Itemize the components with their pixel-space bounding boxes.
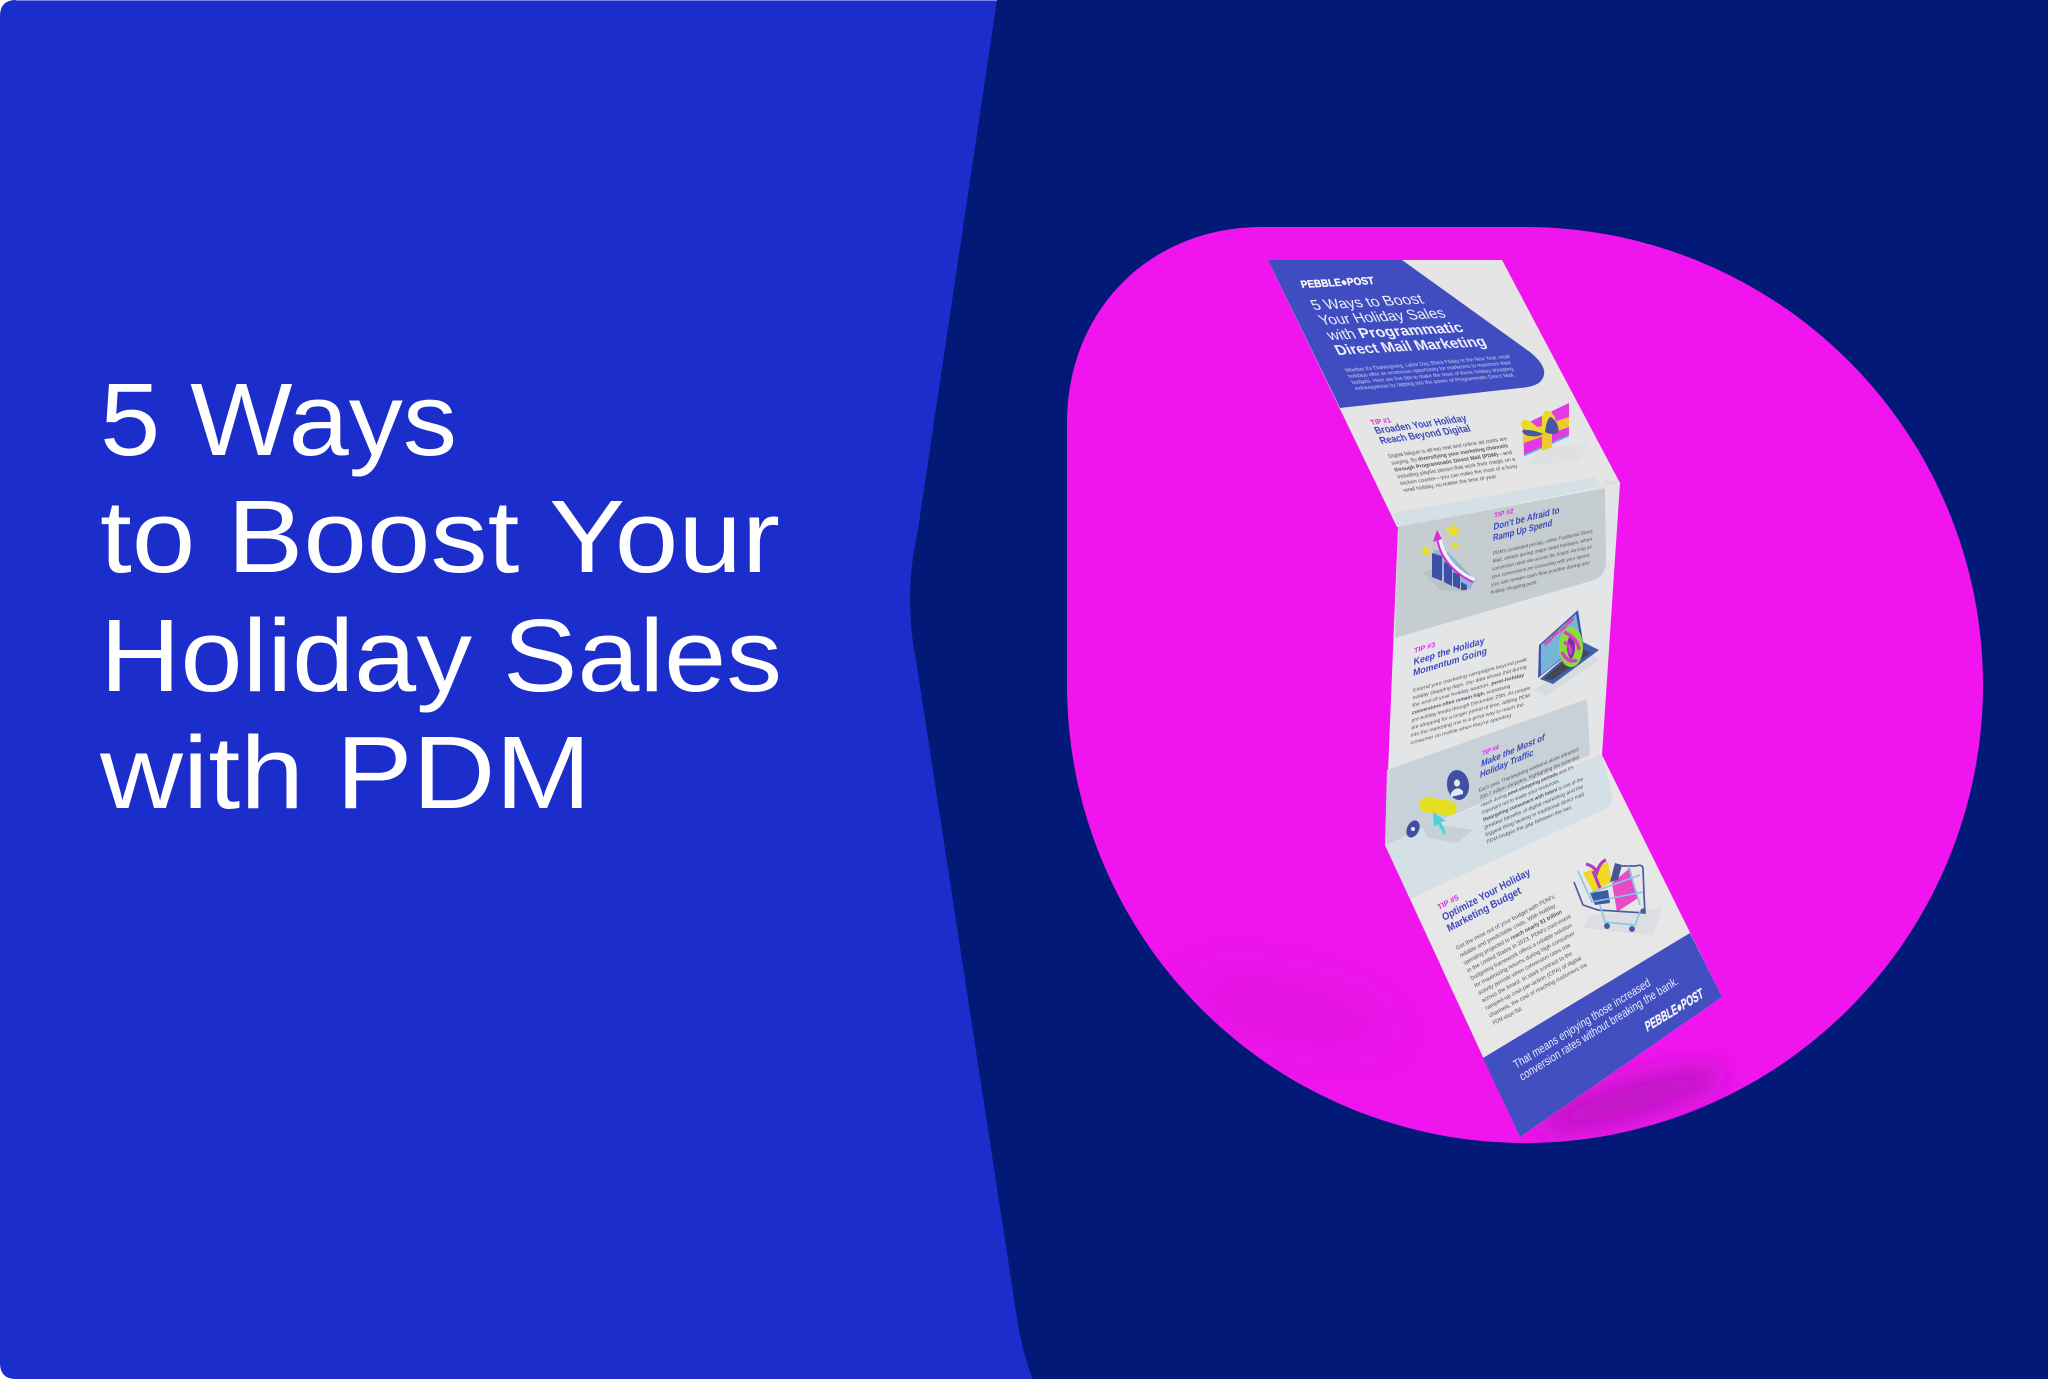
header title: 5 Ways to Boost — [1308, 291, 1428, 314]
header intro — [1344, 354, 1521, 392]
tip 1 heading: Reach Beyond Digital — [1378, 424, 1473, 447]
tip 4 body: reach during post-shopping periods and it's — [1481, 764, 1574, 809]
tip 4 body: PDM bridges the gap between the two. — [1486, 804, 1573, 846]
tip 1 body: including playlist pieces that work their magic on a — [1396, 457, 1517, 480]
header title: Direct Mail Marketing — [1332, 334, 1490, 359]
logo: PEBBLE●POST — [1299, 275, 1376, 291]
tip 5 body: budgeting framework offers a reliable solution — [1470, 923, 1573, 982]
tip 3 body: the end-of-year holiday season, post-holiday — [1412, 672, 1525, 709]
tip 2 heading — [1493, 496, 1560, 544]
tip 4 heading — [1480, 724, 1547, 781]
tip 3 body: pre-holiday levels through December 25th. As people — [1411, 685, 1531, 724]
tip 5 body: Get the most out of your budget with PDM's — [1455, 894, 1556, 952]
tip 1 heading: TIP #1 — [1369, 416, 1393, 427]
header intro: holidays offer an enormous opportunity for marketers to maximize their — [1347, 360, 1513, 380]
tip 5 body: channels, the cost of reaching customers via — [1488, 962, 1588, 1019]
tip 2 body: Mail, shines during major retail holidays, when — [1492, 536, 1592, 565]
title: to Boost Your — [100, 479, 780, 594]
tip 3 body — [1410, 655, 1532, 746]
tip 2 body: your conversions are increasing with your spend, — [1491, 552, 1590, 580]
tip 2 body: you can remain cash flow positive during any — [1491, 560, 1590, 588]
tip 5 heading — [1436, 857, 1538, 935]
tip 4 heading: TIP #4 — [1482, 744, 1499, 758]
panel: sheet middle section — [1385, 483, 1620, 845]
tip 5 body: activity periods when conversion rates rise — [1477, 942, 1572, 997]
tip 4 body: biggest thing lacking in traditional direct mail. — [1485, 791, 1586, 838]
blue left panel — [0, 0, 1033, 1379]
tip 5 body: reliable and predictable costs. With holiday — [1459, 903, 1557, 959]
tip 3 heading: TIP #3 — [1414, 642, 1435, 655]
header title: with Programmatic — [1322, 320, 1467, 344]
tip 5 body: in the United States in 2023, PDM's cost-event — [1466, 914, 1573, 974]
tip 5 heading: TIP #5 — [1436, 893, 1460, 912]
tip 1 heading: Broaden Your Holiday — [1373, 414, 1469, 437]
icon: gift — [1521, 403, 1588, 465]
title — [99, 362, 782, 830]
magenta blob — [1067, 227, 1983, 1143]
tip 5 heading: Optimize Your Holiday — [1441, 867, 1533, 924]
tip 4 body: Retargeting consumers with intent is one of the — [1483, 776, 1584, 824]
tip 3 body: Extend your marketing campaigns beyond peak — [1413, 657, 1528, 694]
tip 3 body: are shopping for a longer period of time, adding PDM — [1411, 693, 1530, 731]
tip 5 body: spending projected to reach nearly $1 trillion — [1462, 909, 1563, 967]
soft shadows on blob — [1196, 966, 1730, 1142]
tip 4 heading: Holiday Traffic — [1480, 747, 1534, 781]
tip 1 body: retail holiday, no matter the time of year. — [1402, 474, 1499, 494]
tip 1 body: kitchen counter—you can make the most of a busy — [1399, 464, 1519, 487]
tip 2 body: conversion rates rise across the board. As long as — [1492, 544, 1592, 573]
tip 5 heading: Marketing Budget — [1445, 885, 1524, 935]
navy background — [880, 0, 2048, 1379]
closing message: That means enjoying those increased — [1512, 977, 1653, 1072]
tip 1 heading — [1369, 405, 1474, 447]
closing banner — [1483, 933, 1722, 1137]
tip 2 body: PDM's consistent pricing, unlike Traditional Direct — [1493, 528, 1593, 557]
header title: Your Holiday Sales — [1316, 305, 1449, 329]
tip 1 body: through Programmatic Direct Mail (PDM) —and — [1393, 450, 1514, 474]
tip 5 body: for maximizing returns during high consumer — [1474, 931, 1576, 989]
tip 1 body: surging. By diversifying your marketing channels — [1390, 443, 1510, 467]
tip 2 body: holiday shopping push. — [1491, 579, 1538, 596]
tip 1 body — [1387, 436, 1524, 494]
tip 4 body: greatest benefits of digital marketing and the — [1484, 784, 1584, 831]
icon: shopping cart with gifts — [1574, 860, 1662, 935]
tip 3 body: conversions often remain high, surpassing — [1412, 683, 1511, 716]
tip 3 heading: Momentum Going — [1413, 646, 1487, 679]
tip 2 heading: Don't be Afraid to — [1493, 505, 1560, 533]
tip 4 body: important not to waste your resources. — [1482, 778, 1560, 816]
tip 2 heading: Ramp Up Spend — [1493, 518, 1553, 544]
header intro: budgets. Here are five tips to make the most of these holiday shopping — [1351, 367, 1515, 386]
panel: sheet bottom section — [1385, 747, 1722, 1137]
icon: user badges and cursor — [1404, 769, 1473, 843]
tip 2 heading: TIP #2 — [1494, 508, 1514, 520]
header intro: Whether it's Thanksgiving, Labor Day, Black Friday or the New Year, retail — [1344, 354, 1511, 374]
tip 2 body — [1491, 528, 1593, 596]
tip 5 body: across the board. In stark contrast to the — [1481, 951, 1574, 1004]
icon: laptop with wreath — [1534, 610, 1600, 696]
footer logo: PEBBLE●POST — [1643, 985, 1705, 1035]
tip 3 body: consumer on mobile when they're spending. — [1410, 712, 1513, 746]
title: 5 Ways — [100, 362, 457, 477]
tip 2 band — [1395, 488, 1606, 638]
tip 1 body: Digital fatigue is all-too real and online ad costs are — [1387, 436, 1509, 460]
tip 4 band lower — [1385, 755, 1613, 899]
tip 5 body — [1455, 891, 1598, 1027]
tip 3 body: into the marketing mix is a great way to reach the — [1411, 702, 1524, 739]
header title — [1306, 289, 1490, 359]
tip 4 body: 200.7 million shoppers, highlighting the potential — [1480, 754, 1579, 801]
icon: chart with arrow — [1420, 522, 1475, 592]
title: Holiday Sales — [100, 598, 782, 713]
header intro: extravaganzas by tapping into the power of Programmatic Direct Mail. — [1354, 373, 1516, 392]
panel: sheet top section — [1268, 260, 1620, 527]
tip 4 body: Each year, Thanksgiving weekend alone attracted — [1478, 747, 1579, 794]
tip 3 heading — [1413, 626, 1488, 679]
header background — [1268, 260, 1544, 408]
tip 5 body: ramped-up cost-per-action (CPA) of digital — [1485, 956, 1583, 1012]
tip 4 body — [1478, 747, 1587, 846]
tip 4 band — [1385, 699, 1590, 845]
tip 3 body: holiday shopping days. Our data shows that during — [1413, 664, 1527, 701]
tip 4 heading: Make the Most of — [1481, 732, 1546, 770]
title: with PDM — [99, 715, 591, 830]
tip 3 heading: Keep the Holiday — [1413, 635, 1485, 668]
closing message: conversion rates without breaking the bank. — [1518, 975, 1681, 1084]
tip 5 body: PDM stays flat. — [1492, 1006, 1524, 1027]
folded infographic sheet — [1268, 260, 1722, 1137]
tip 2 band top edge — [1393, 477, 1603, 527]
